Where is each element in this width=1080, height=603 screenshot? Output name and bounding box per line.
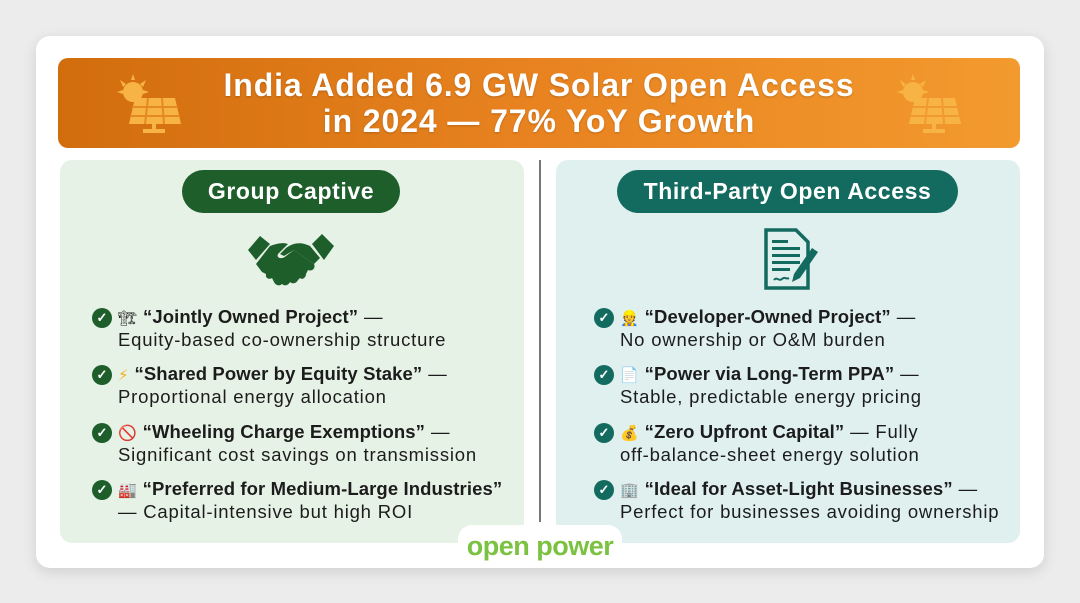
item 3: 🚫 “Wheeling Charge Exemptions” — — [118, 421, 450, 442]
item 4: 🏢 “Ideal for Asset-Light Businesses” — — [620, 478, 978, 499]
item 2: 📄 “Power via Long-Term PPA” — — [620, 363, 919, 384]
panel: group captive — [60, 160, 524, 543]
item 3: off-balance-sheet energy solution — [620, 444, 920, 465]
panel: group captive: ✓ — [97, 425, 107, 440]
item 3 — [594, 421, 920, 465]
title banner — [58, 58, 1020, 148]
panel: third-party open access: ✓ — [599, 425, 609, 440]
heading: India Added 6.9 GW Solar Open Access — [223, 67, 855, 103]
item 4: — Capital-intensive but high ROI — [118, 501, 413, 522]
item 1 — [92, 306, 446, 350]
item 4: 🏭 “Preferred for Medium-Large Industries” — [118, 478, 502, 499]
logo: open power: open power — [467, 531, 613, 561]
icon: solar panel right — [898, 74, 961, 133]
item 2: Proportional energy allocation — [118, 386, 387, 407]
item 2 — [92, 363, 448, 407]
item 1: 🏗 “Jointly Owned Project” — — [118, 306, 383, 327]
item 3: Significant cost savings on transmission — [118, 444, 477, 465]
item 1: 👷 “Developer-Owned Project” — — [620, 306, 916, 327]
pill heading: Group Captive — [208, 178, 374, 204]
icon: handshake — [248, 234, 334, 286]
item 4 — [594, 478, 999, 522]
pill heading — [182, 170, 400, 213]
divider — [539, 160, 541, 522]
item 1 — [594, 306, 916, 350]
heading: in 2024 — 77% YoY Growth — [323, 103, 755, 139]
icon: contract document — [764, 228, 818, 290]
logo: open power — [458, 525, 622, 568]
icon: solar panel left — [117, 74, 181, 133]
pill heading — [617, 170, 958, 213]
panel: group captive: ✓ — [97, 310, 107, 325]
item 1: No ownership or O&M burden — [620, 329, 886, 350]
item 1: Equity-based co-ownership structure — [118, 329, 446, 350]
panel: group captive: ✓ — [97, 367, 107, 382]
heading — [223, 67, 855, 139]
panel: third-party open access: ✓ — [599, 482, 609, 497]
panel: third-party open access — [556, 160, 1020, 543]
item 4: Perfect for businesses avoiding ownership — [620, 501, 999, 522]
item 3 — [92, 421, 477, 465]
item 4 — [92, 478, 502, 522]
panel: group captive: ✓ — [97, 482, 107, 497]
item 2 — [594, 363, 922, 407]
pill heading: Third-Party Open Access — [644, 178, 931, 204]
panel: third-party open access: ✓ — [599, 367, 609, 382]
item 2: ⚡ “Shared Power by Equity Stake” — — [118, 363, 448, 384]
item 2: Stable, predictable energy pricing — [620, 386, 922, 407]
panel: third-party open access: ✓ — [599, 310, 609, 325]
item 3: 💰 “Zero Upfront Capital” — Fully — [620, 421, 918, 442]
